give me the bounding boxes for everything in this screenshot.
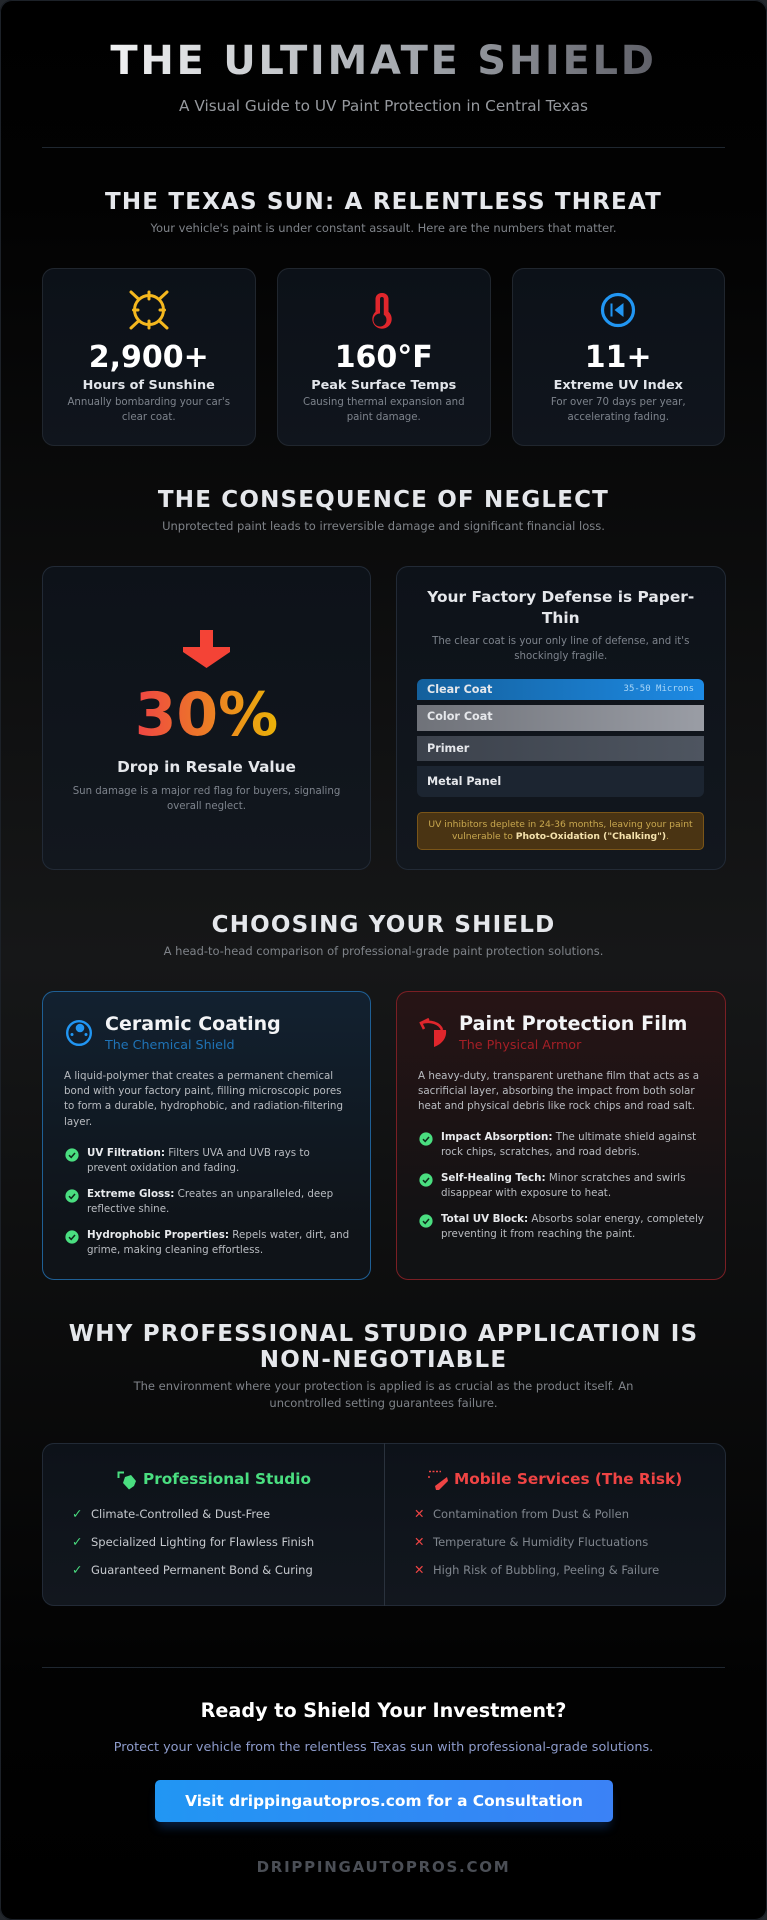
title: THE ULTIMATE SHIELD — [110, 38, 657, 84]
description: Annually bombarding your car's — [67, 396, 230, 408]
benefit text: Total UV Block: Absorbs solar energy, completely — [441, 1213, 704, 1225]
item: ✕ — [414, 1506, 424, 1521]
label: Extreme UV Index — [554, 378, 683, 393]
subtitle: A Visual Guide to UV Paint Protection in Central Texas — [179, 97, 588, 115]
intro text: A head-to-head comparison of professional-grade paint protection solutions. — [164, 944, 603, 958]
warning note: vulnerable to Photo-Oxidation ("Chalking"). — [452, 831, 669, 842]
item: Specialized Lighting for Flawless Finish — [91, 1535, 314, 1549]
label: Hours of Sunshine — [83, 378, 215, 393]
subtitle: The Chemical Shield — [105, 1037, 235, 1052]
description: paint damage. — [347, 412, 421, 423]
intro text: The environment where your protection is applied is as crucial as the product itself. An — [134, 1379, 633, 1393]
list — [414, 1500, 704, 1584]
layer: color coat — [417, 705, 704, 731]
benefit text: preventing it from reaching the paint. — [441, 1228, 635, 1240]
benefit text — [441, 1213, 704, 1240]
benefit text: Self-Healing Tech: Minor scratches and swirls — [441, 1172, 685, 1184]
icon: studio — [117, 1471, 138, 1491]
column title: Professional Studio — [143, 1470, 311, 1488]
item: Guaranteed Permanent Bond & Curing — [91, 1563, 313, 1577]
item: Climate-Controlled & Dust-Free — [91, 1507, 270, 1521]
description — [73, 786, 340, 812]
list — [72, 1500, 362, 1584]
layer: clear coat — [417, 679, 704, 700]
section heading: choosing — [164, 912, 603, 958]
label: Drop in Resale Value — [117, 758, 296, 776]
layer: primer: Primer — [427, 742, 469, 755]
benefit text: UV Filtration: Filters UVA and UVB rays to — [87, 1147, 310, 1159]
description: Sun damage is a major red flag for buyers, signaling — [73, 786, 340, 796]
item: High Risk of Bubbling, Peeling & Failure — [433, 1563, 659, 1577]
value: 2,900+ — [89, 340, 209, 374]
description: to form a durable, hydrophobic, and radiation-filtering — [64, 1100, 343, 1112]
description: layer. — [64, 1116, 92, 1128]
benefit text: rock chips, scratches, and road debris. — [441, 1146, 640, 1158]
description — [67, 396, 230, 423]
icon: mobile risk — [427, 1469, 449, 1491]
benefit text — [87, 1188, 333, 1215]
benefit: extreme gloss — [65, 1188, 333, 1215]
benefit text — [441, 1172, 685, 1199]
column: mobile services — [384, 1443, 725, 1606]
icon: deflecting shield — [419, 1018, 446, 1047]
item: Temperature & Humidity Fluctuations — [433, 1535, 648, 1549]
description — [551, 396, 686, 423]
description: Causing thermal expansion and — [303, 396, 465, 408]
description: A liquid-polymer that creates a permanent chemical — [64, 1070, 333, 1082]
benefit text: grime, making cleaning effortless. — [87, 1244, 263, 1256]
title: Ceramic Coating — [105, 1013, 281, 1035]
panel title: Your Factory Defense is Paper- — [427, 588, 694, 606]
intro text — [0, 1378, 767, 1412]
heading: WHY PROFESSIONAL STUDIO APPLICATION IS — [69, 1321, 698, 1347]
icon: sun — [129, 290, 169, 330]
header — [110, 38, 657, 115]
panel: factory defense — [396, 566, 726, 870]
item — [414, 1556, 659, 1584]
heading — [0, 1321, 767, 1373]
check icon — [65, 1148, 79, 1162]
benefit text: Hydrophobic Properties: Repels water, dirt, and — [87, 1229, 349, 1241]
panel: studio vs mobile comparison — [42, 1443, 726, 1606]
layer: metal panel — [417, 766, 704, 797]
icon: molecule — [66, 1020, 92, 1046]
item: ✓ — [72, 1562, 82, 1577]
item — [414, 1528, 648, 1556]
description: A heavy-duty, transparent urethane film that acts as a — [418, 1070, 699, 1082]
column: professional studio — [42, 1443, 383, 1606]
heading: THE TEXAS SUN: A RELENTLESS THREAT — [105, 189, 662, 215]
item: ✕ — [414, 1534, 424, 1549]
section heading: neglect — [158, 487, 609, 533]
panel: paint protection film — [396, 991, 726, 1280]
layer: clear coat: Clear Coat — [427, 683, 492, 696]
description: bond with your factory paint, filling microscopic pores — [64, 1085, 342, 1097]
benefit text — [441, 1131, 696, 1158]
benefit text — [87, 1147, 310, 1174]
benefit: impact absorption — [419, 1131, 696, 1158]
warning note — [417, 812, 704, 850]
icon: UV dial — [600, 292, 636, 328]
item: ✓ — [72, 1506, 82, 1521]
panel: resale value — [42, 566, 371, 870]
panel intro: The clear coat is your only line of defense, and it's — [432, 636, 689, 646]
footer brand: DRIPPINGAUTOPROS.COM — [257, 1858, 510, 1876]
heading: THE CONSEQUENCE OF NEGLECT — [158, 487, 609, 513]
item: Contamination from Dust & Pollen — [433, 1507, 629, 1521]
call to action — [0, 1697, 767, 1824]
layer: color coat: Color Coat — [427, 710, 493, 723]
benefit: hydrophobic — [65, 1229, 349, 1256]
item: ✓ — [72, 1534, 82, 1549]
description: sacrificial layer, absorbing the impact from both solar — [418, 1085, 695, 1097]
item — [72, 1528, 314, 1556]
CTA text: Protect your vehicle from the relentless Texas sun with professional-grade solutions. — [114, 1740, 653, 1755]
heading: CHOOSING YOUR SHIELD — [212, 912, 555, 938]
benefit: UV filtration — [65, 1147, 310, 1174]
description — [64, 1070, 343, 1128]
description: For over 70 days per year, — [551, 396, 686, 408]
section heading: Texas sun — [105, 189, 662, 235]
stat card: UV index — [512, 268, 725, 446]
icon: down arrow — [183, 630, 230, 668]
item — [72, 1556, 313, 1584]
CTA heading: Ready to Shield Your Investment? — [201, 1699, 566, 1722]
CTA button: Visit drippingautopros.com for a Consultation — [185, 1792, 583, 1810]
value: 160°F — [335, 340, 433, 374]
benefit text: Extreme Gloss: Creates an unparalleled, deep — [87, 1188, 333, 1200]
column title: Mobile Services (The Risk) — [454, 1470, 682, 1488]
intro text: uncontrolled setting guarantees failure. — [269, 1396, 498, 1410]
icon: thermometer — [372, 293, 392, 329]
description — [418, 1070, 699, 1112]
stat card: temperature — [277, 268, 490, 446]
subtitle: The Physical Armor — [459, 1037, 581, 1052]
description: overall neglect. — [167, 801, 246, 812]
check icon — [65, 1230, 79, 1244]
panel intro — [432, 636, 689, 662]
benefit text: Impact Absorption: The ultimate shield against — [441, 1131, 696, 1143]
divider — [384, 1443, 385, 1606]
panel intro: shockingly fragile. — [514, 651, 607, 662]
benefit: total UV block — [419, 1213, 704, 1240]
stat card: sunshine — [42, 268, 256, 446]
section heading: professional application — [69, 1321, 698, 1410]
check icon — [419, 1132, 433, 1146]
description: accelerating fading. — [567, 412, 669, 423]
big percentage: 30% — [135, 680, 278, 750]
check icon — [65, 1189, 79, 1203]
intro text: Unprotected paint leads to irreversible damage and significant financial loss. — [162, 519, 605, 533]
panel: ceramic coating — [42, 991, 371, 1280]
description: clear coat. — [122, 412, 176, 423]
layer: metal panel: Metal Panel — [427, 775, 501, 788]
item — [72, 1500, 270, 1528]
benefit text — [87, 1229, 349, 1256]
layer: primer — [417, 736, 704, 761]
panel title: Thin — [542, 609, 580, 627]
item — [414, 1500, 629, 1528]
benefit text: prevent oxidation and fading. — [87, 1162, 239, 1174]
layer: clear coat: 35-50 Microns — [624, 684, 694, 694]
panel title — [427, 588, 694, 627]
description — [303, 396, 465, 423]
intro text: Your vehicle's paint is under constant assault. Here are the numbers that matter. — [150, 221, 617, 235]
label: Peak Surface Temps — [311, 378, 456, 393]
check icon — [419, 1173, 433, 1187]
benefit text: reflective shine. — [87, 1203, 169, 1215]
benefit text: disappear with exposure to heat. — [441, 1187, 611, 1199]
item: ✕ — [414, 1562, 424, 1577]
heading: NON-NEGOTIABLE — [260, 1347, 507, 1373]
check icon — [419, 1214, 433, 1228]
warning note: UV inhibitors deplete in 24-36 months, leaving your paint — [428, 818, 693, 830]
benefit: self-healing — [419, 1172, 685, 1199]
description: heat and physical debris like rock chips and road salt. — [418, 1100, 695, 1112]
CTA button — [155, 1780, 613, 1822]
value: 11+ — [585, 340, 652, 374]
title: Paint Protection Film — [459, 1012, 687, 1035]
layer diagram — [417, 679, 704, 797]
